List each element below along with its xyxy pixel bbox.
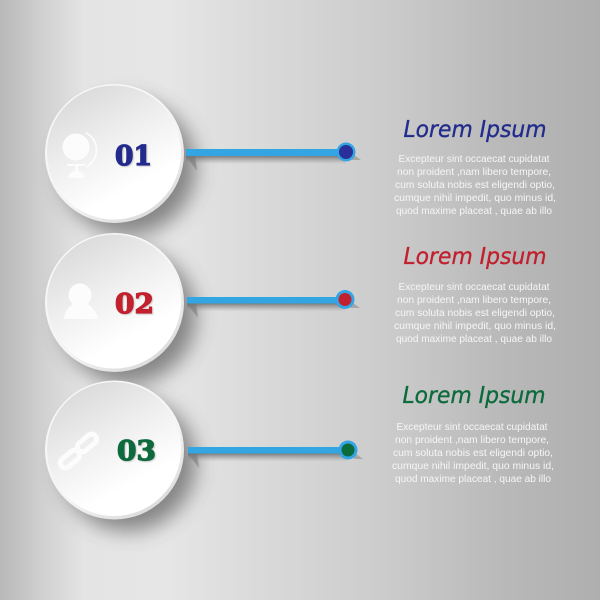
body text 01: non proident ,nam libero tempore, <box>397 167 551 178</box>
body text 02: non proident ,nam libero tempore, <box>397 295 551 306</box>
body text 01 <box>394 154 556 217</box>
body text 01: cum soluta nobis est eligendi optio, <box>395 180 555 191</box>
body text 03: cumque nihil impedit, quo minus id, <box>392 461 554 472</box>
icon: globe <box>62 133 97 178</box>
body text 03 <box>392 422 554 485</box>
circle 02 <box>45 233 196 384</box>
icon: person <box>64 284 98 319</box>
body text 03: cum soluta nobis est eligendi optio, <box>393 448 553 459</box>
body text 02: cum soluta nobis est eligendi optio, <box>395 308 555 319</box>
body text 02: quod maxime placeat , quae ab illo <box>396 334 552 345</box>
heading 01: Lorem Ipsum <box>404 117 546 143</box>
body text 03: Excepteur sint occaecat cupidatat <box>396 422 548 433</box>
heading 03: Lorem Ipsum <box>402 383 546 409</box>
connector line 01 <box>186 142 361 171</box>
body text 01: cumque nihil impedit, quo minus id, <box>394 193 556 204</box>
connector line 03 <box>188 440 363 468</box>
body text 03: quod maxime placeat , quae ab illo <box>395 474 551 485</box>
body text 02 <box>394 282 556 345</box>
panel: step 02 <box>45 233 556 384</box>
body text 03: non proident ,nam libero tempore, <box>395 435 549 446</box>
number 03: 03 <box>117 436 156 467</box>
circle 03 <box>45 380 196 531</box>
panel: step 03 <box>45 380 554 531</box>
icon: chain link <box>58 432 99 470</box>
number 02: 02 <box>115 289 154 320</box>
circle 01 <box>45 84 196 235</box>
body text 02: Excepteur sint occaecat cupidatat <box>398 282 550 293</box>
number 01: 01 <box>115 141 152 172</box>
connector line 02 <box>187 290 360 318</box>
heading 02: Lorem Ipsum <box>404 244 546 270</box>
body text 01: quod maxime placeat , quae ab illo <box>396 206 552 217</box>
panel: step 01 <box>45 84 556 235</box>
body text 01: Excepteur sint occaecat cupidatat <box>398 154 550 165</box>
body text 02: cumque nihil impedit, quo minus id, <box>394 321 556 332</box>
